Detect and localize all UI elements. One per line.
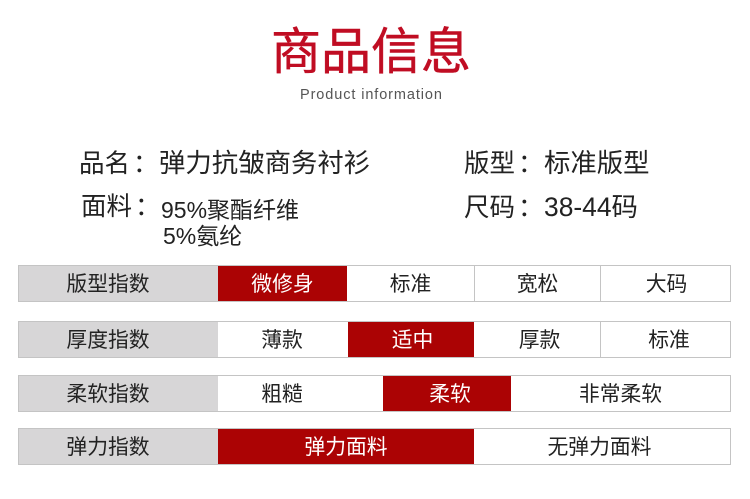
label: fit index [19, 266, 218, 301]
option: plus size [600, 266, 730, 301]
option: loose [474, 266, 600, 301]
row: fit index [18, 265, 731, 302]
label: thickness index: 厚度指数 [66, 329, 150, 352]
label: thickness index [19, 322, 218, 357]
fabric label [81, 193, 161, 221]
fabric label: ： [135, 193, 161, 221]
option: thick: 厚款 [519, 329, 560, 352]
option: rough: 粗糙 [261, 383, 303, 406]
option: medium selected [348, 322, 474, 357]
fabric composition: 5%氨纶 [163, 223, 242, 249]
row: thickness index [18, 321, 731, 358]
option: standard: 标准 [390, 273, 431, 296]
size range: 尺码 38-44码 [464, 192, 638, 222]
option: loose: 宽松 [517, 273, 558, 296]
option: slim selected [218, 266, 347, 301]
product name: 品名 弹力抗皱商务衬衫 [79, 148, 370, 178]
fit type: 版型 标准版型 [464, 148, 650, 178]
option: thin: 薄款 [261, 329, 303, 352]
label: fit index: 版型指数 [66, 273, 150, 296]
option: stretch fabric selected [218, 429, 474, 464]
row: softness index [18, 375, 731, 412]
option: medium selected: 适中 [392, 329, 433, 352]
size range: ： [518, 194, 544, 222]
option: standard [600, 322, 730, 357]
option: plus size: 大码 [646, 273, 687, 296]
label: elasticity index: 弹力指数 [66, 436, 150, 459]
fabric composition: 95%聚酯纤维 [161, 197, 299, 223]
subtitle: Product information [300, 87, 443, 103]
option: soft selected [383, 376, 511, 411]
label: softness index [19, 376, 218, 411]
fabric label: 面料 [81, 193, 132, 221]
fabric composition [161, 197, 299, 249]
fit type: ： [518, 150, 544, 178]
option: slim selected: 微修身 [251, 273, 314, 296]
option: stretch fabric selected: 弹力面料 [304, 436, 388, 459]
title: 商品信息 [271, 24, 471, 80]
option: soft selected: 柔软 [429, 383, 471, 406]
row: elasticity index [18, 428, 731, 465]
option: non-stretch fabric: 无弹力面料 [548, 436, 651, 459]
label: softness index: 柔软指数 [66, 383, 150, 406]
option: very soft: 非常柔软 [579, 383, 662, 406]
product name: ： [133, 150, 159, 178]
option: standard: 标准 [648, 329, 690, 352]
label: elasticity index [19, 429, 218, 464]
